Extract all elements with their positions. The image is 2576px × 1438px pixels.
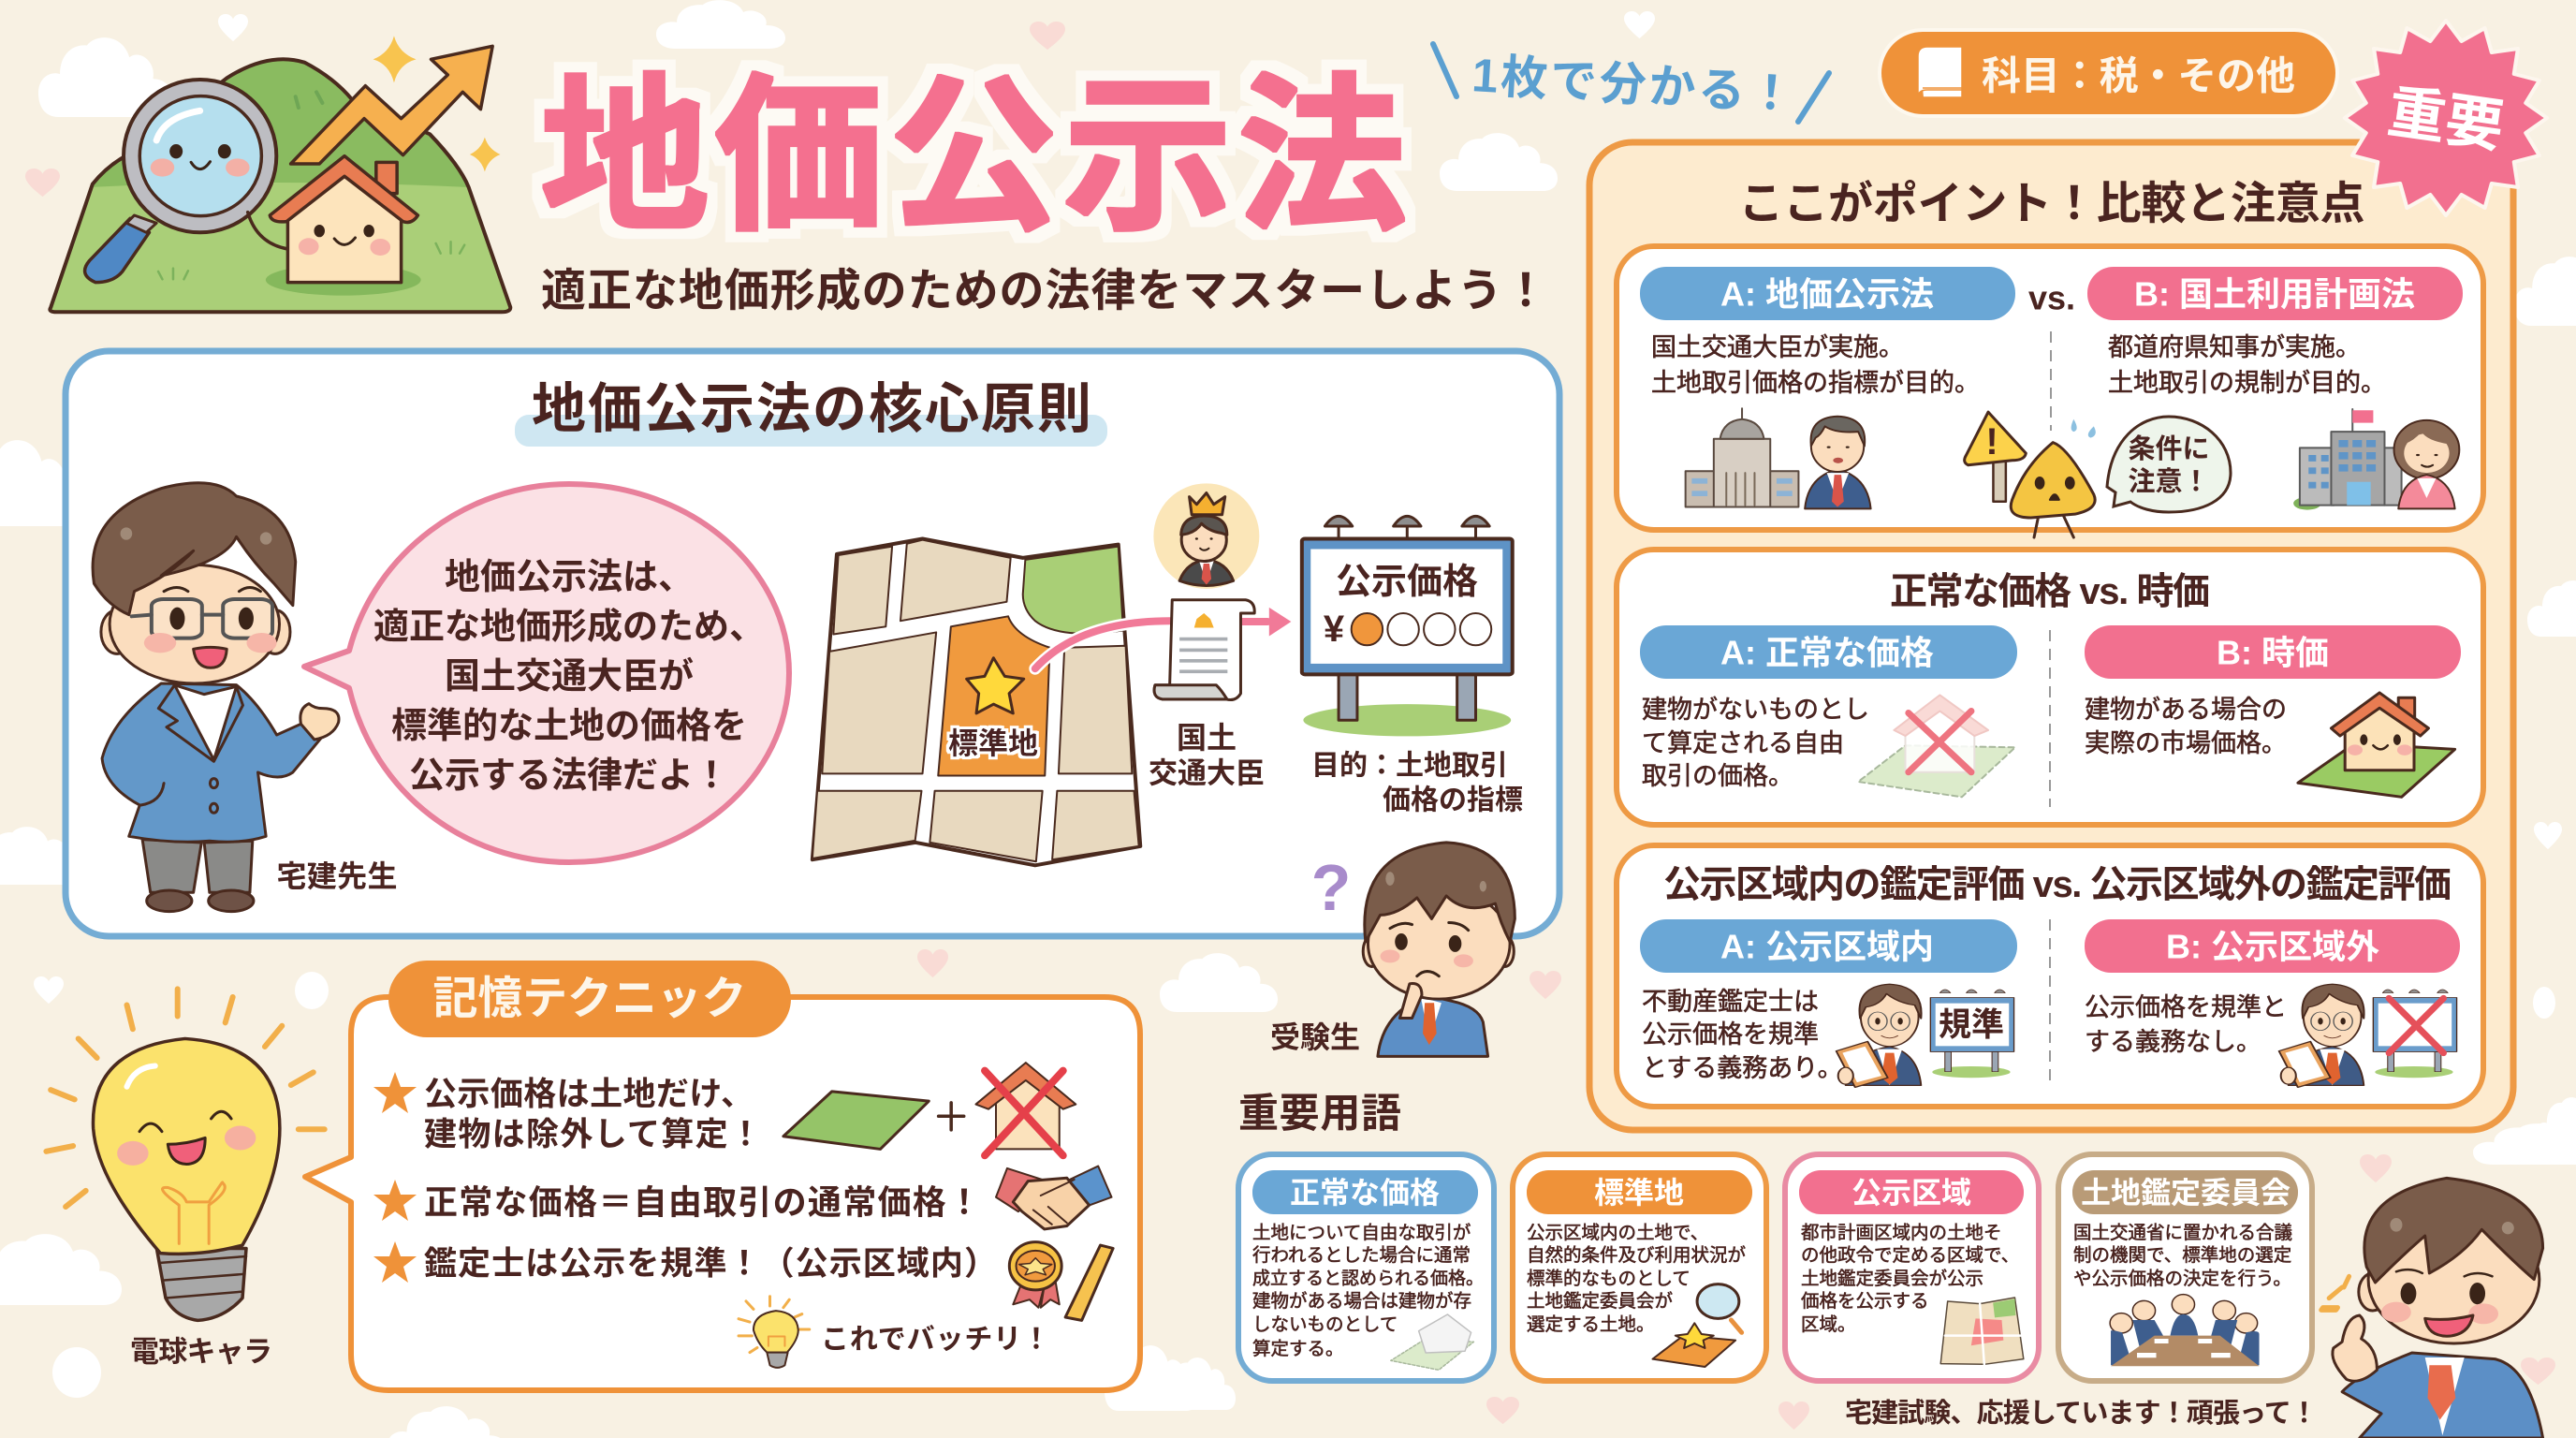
definition text: 公示区域内の土地で、 xyxy=(1527,1223,1708,1243)
definition text xyxy=(1252,1223,1484,1359)
card: 正常な価格: 正常な価格 xyxy=(1290,1176,1440,1210)
heading highlight xyxy=(515,415,1107,447)
card: 公示区域 xyxy=(1785,1154,2039,1381)
bullet 1: 建物は除外して算定！ xyxy=(424,1117,762,1153)
heading: key terms: 重要用語 xyxy=(1238,1092,1401,1137)
speech bubble: 公示する法律だよ！ xyxy=(409,756,729,796)
text A: 公示価格を規準 xyxy=(1642,1020,1819,1049)
icon: minister xyxy=(1153,483,1259,589)
bullet 3: 鑑定士は公示を規準！（公示区域内） xyxy=(424,1246,997,1283)
definition text xyxy=(1527,1223,1746,1335)
comparison 3: 公示区域内 vs 公示区域外: B: 公示区域外 xyxy=(2166,928,2379,966)
definition text: や公示価格の決定を行う。 xyxy=(2073,1269,2291,1289)
encouragement text: 宅建試験、応援しています！頑張って！ xyxy=(1845,1398,2318,1429)
icon: vacant lot xyxy=(1391,1314,1473,1370)
icon: small bulb xyxy=(739,1297,810,1368)
definition text: 土地について自由な取引が xyxy=(1252,1223,1471,1243)
icon: magnifier and star on land xyxy=(1653,1284,1742,1367)
card: 標準地: 標準地 xyxy=(1594,1176,1684,1210)
speech bubble: 国土交通大臣が xyxy=(445,657,694,697)
bullet 1: 公示価格は土地だけ、 xyxy=(424,1077,754,1113)
panel: memory techniques xyxy=(305,961,1140,1390)
billboard: 公示価格 xyxy=(1302,516,1513,736)
speech bubble: caution xyxy=(2107,417,2231,512)
definition text: 成立すると認められる価格。 xyxy=(1252,1269,1484,1289)
label: purpose: 価格の指標 xyxy=(1383,785,1523,816)
definition text: 制の機関で、標準地の選定 xyxy=(2073,1245,2291,1266)
label: minister: 交通大臣 xyxy=(1149,757,1265,790)
icon: appraiser with standard sign: 規準 xyxy=(1939,1007,2004,1044)
text B xyxy=(2085,993,2287,1056)
heading: ここがポイント！比較と注意点 xyxy=(1739,180,2364,229)
text B xyxy=(2085,696,2287,757)
billboard: 公示価格: ¥ xyxy=(1324,609,1345,650)
bullet 2: 正常な価格＝自由取引の通常価格！ xyxy=(424,1183,981,1222)
speech bubble xyxy=(304,484,789,862)
text B: 建物がある場合の xyxy=(2085,696,2287,724)
definition text xyxy=(2073,1223,2292,1289)
subject badge xyxy=(1880,30,2337,116)
card: 土地鑑定委員会: 土地鑑定委員会 xyxy=(2081,1176,2291,1210)
text A: 国土交通大臣が実施。 xyxy=(1651,333,1904,361)
heading: 正常な価格 vs. 時価 xyxy=(1890,571,2210,612)
label: minister xyxy=(1149,721,1265,790)
card: 標準地 xyxy=(1513,1154,1766,1381)
card: 公示区域: 公示区域 xyxy=(1852,1176,1971,1210)
definition text: 建物がある場合は建物が存 xyxy=(1252,1291,1471,1312)
burst badge: 重要: 重要 xyxy=(2384,80,2508,160)
comparison 2: 正常な価格 vs 時価: A: 正常な価格 xyxy=(1720,634,1934,672)
icon: medal and ruler xyxy=(1009,1242,1113,1320)
pill A xyxy=(1640,625,2017,679)
subject badge: 科目：税・その他 xyxy=(1982,54,2295,98)
text A xyxy=(1642,696,1869,790)
icon: appraiser with crossed sign xyxy=(2279,984,2457,1087)
illustration: hill, magnifier, house and rising arrow xyxy=(50,36,510,312)
definition text xyxy=(1801,1223,2019,1335)
label pill xyxy=(388,961,791,1037)
label: purpose: 目的：土地取引 xyxy=(1311,751,1508,782)
label: minister: 国土 xyxy=(1177,721,1237,755)
card: 土地鑑定委員会 xyxy=(2058,1154,2312,1381)
speech bubble: 標準的な土地の価格を xyxy=(391,707,747,746)
icon: book xyxy=(1918,47,1962,97)
definition text: 価格を公示する xyxy=(1801,1291,1929,1312)
definition text: 自然的条件及び利用状況が xyxy=(1527,1245,1746,1266)
icon: question mark: ? xyxy=(1311,851,1351,924)
label: purpose xyxy=(1311,751,1523,816)
character: student xyxy=(1311,843,1515,1056)
subtitle: 適正な地価形成のための法律をマスターしよう！ xyxy=(541,267,1548,316)
text B: 土地取引の規制が目的。 xyxy=(2108,369,2386,397)
map with standard land xyxy=(812,538,1170,865)
comparison 1: 地価公示法 vs 国土利用計画法 xyxy=(1617,246,2483,537)
icon: national diet and minister xyxy=(1686,408,1871,508)
character: teacher xyxy=(93,483,339,912)
text A: て算定される自由 xyxy=(1642,729,1844,757)
icon: warning character: ! xyxy=(1985,421,1998,462)
icon: proclamation scroll and arrow xyxy=(1154,600,1291,700)
text A xyxy=(1651,333,1980,397)
text A: 土地取引価格の指標が目的。 xyxy=(1651,369,1980,397)
tagline: 1枚で分かる: 1枚で分かる！ xyxy=(1471,49,1796,121)
speech bubble: 適正な地価形成のため、 xyxy=(373,608,765,647)
definition text: 都市計画区域内の土地そ xyxy=(1801,1223,2002,1243)
comparison 1: 地価公示法 vs 国土利用計画法: B: 国土利用計画法 xyxy=(2134,275,2415,314)
comparison 1: 地価公示法 vs 国土利用計画法: A: 地価公示法 xyxy=(1720,275,1934,314)
character: light bulb xyxy=(46,989,325,1320)
text B: 実際の市場価格。 xyxy=(2085,729,2287,757)
vs: vs. xyxy=(2028,279,2075,317)
panel: 核心原則 xyxy=(66,351,1559,936)
definition text: 選定する土地。 xyxy=(1527,1314,1655,1335)
definition text: 行われるとした場合に通常 xyxy=(1252,1245,1471,1266)
title: 地価公示法 xyxy=(541,64,1406,252)
text B: 公示価格を規準と xyxy=(2085,993,2287,1021)
text A: 不動産鑑定士は xyxy=(1642,988,1819,1016)
definition text: の他政令で定める区域で、 xyxy=(1801,1245,2019,1266)
label: bulb character: 電球キャラ xyxy=(130,1336,272,1369)
definition text: しないものとして xyxy=(1252,1314,1398,1335)
speech bubble: 地価公示法は、 xyxy=(445,558,694,597)
heading: 記憶テクニック xyxy=(432,975,747,1024)
closing note: これでバッチリ！ xyxy=(821,1325,1050,1356)
definition text: 区域。 xyxy=(1801,1314,1856,1335)
definition text: 国土交通省に置かれる合議 xyxy=(2073,1223,2292,1243)
speech bubble: caution: 注意！ xyxy=(2128,466,2210,497)
icon: committee meeting xyxy=(2110,1295,2260,1366)
pill B xyxy=(2085,625,2461,679)
label: standard land: 標準地 xyxy=(948,726,1038,760)
icon: land plus crossed house xyxy=(783,1063,1076,1155)
text A: 取引の価格。 xyxy=(1642,762,1793,790)
comparison 2: 正常な価格 vs 時価 xyxy=(1617,550,2483,825)
label: student: 受験生 xyxy=(1270,1020,1360,1054)
character: cheering graduate xyxy=(2321,1178,2543,1438)
speech bubble: caution: 条件に xyxy=(2128,433,2210,464)
definition text: 土地鑑定委員会が公示 xyxy=(1801,1269,1983,1289)
icon: vacant land with crossed house xyxy=(1858,695,2015,797)
heading: 公示区域内の鑑定評価 vs. 公示区域外の鑑定評価 xyxy=(1663,864,2452,905)
billboard: 公示価格: 公示価格 xyxy=(1336,563,1478,602)
text B: 都道府県知事が実施。 xyxy=(2108,333,2361,361)
burst badge: 重要 xyxy=(2345,21,2547,215)
comparison 3: 公示区域内 vs 公示区域外 xyxy=(1617,845,2483,1107)
text B: する義務なし。 xyxy=(2085,1028,2261,1056)
icon: house on land xyxy=(2298,693,2455,797)
panel: points and comparison xyxy=(1589,142,2513,1130)
text A xyxy=(1642,988,1843,1082)
text A: とする義務あり。 xyxy=(1642,1054,1843,1082)
pill B xyxy=(2085,919,2460,973)
heading: 地価公示法の核心原則 xyxy=(532,379,1091,440)
bullet 1 xyxy=(373,1072,762,1153)
comparison 2: 正常な価格 vs 時価: B: 時価 xyxy=(2217,634,2329,672)
text A: 建物がないものとし xyxy=(1642,696,1869,724)
icon: handshake xyxy=(996,1167,1112,1229)
icon: warning character xyxy=(1965,412,2096,537)
definition text: 標準的なものとして xyxy=(1527,1269,1690,1289)
pill A xyxy=(1640,267,2015,320)
icon: prefecture office and governor xyxy=(2293,409,2459,510)
comparison 3: 公示区域内 vs 公示区域外: A: 公示区域内 xyxy=(1720,928,1934,966)
label: teacher: 宅建先生 xyxy=(277,859,397,893)
definition text: 土地鑑定委員会が xyxy=(1527,1291,1673,1312)
pill A xyxy=(1640,919,2017,973)
icon: appraiser with standard sign xyxy=(1837,984,2014,1087)
definition text: 算定する。 xyxy=(1252,1339,1344,1359)
pill B xyxy=(2087,267,2463,320)
card: 正常な価格 xyxy=(1238,1154,1494,1381)
text B xyxy=(2108,333,2386,397)
icon: map xyxy=(1940,1298,2024,1364)
